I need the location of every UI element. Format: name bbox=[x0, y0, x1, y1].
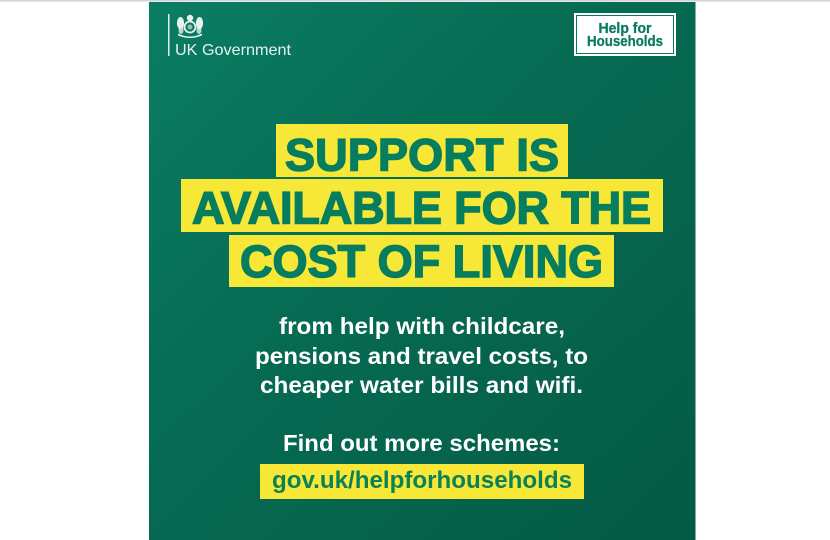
website link box: gov.uk/helpforhouseholds bbox=[272, 467, 572, 494]
UK Government logo bbox=[168, 14, 292, 59]
headline line 1: SUPPORT IS bbox=[285, 130, 559, 180]
Help for Households badge: Households bbox=[587, 34, 663, 50]
Help for Households badge: Help for bbox=[598, 21, 652, 37]
headline line 2: AVAILABLE FOR THE bbox=[192, 182, 651, 234]
logo wordmark: UK Government bbox=[175, 42, 292, 59]
description text: pensions and travel costs, to bbox=[255, 343, 588, 369]
headline bbox=[181, 124, 663, 287]
description text: from help with childcare, bbox=[279, 313, 565, 339]
call to action heading: Find out more schemes: bbox=[283, 430, 560, 456]
icon: royal coat of arms bbox=[177, 15, 203, 38]
headline line 3: COST OF LIVING bbox=[240, 236, 603, 287]
description text: cheaper water bills and wifi. bbox=[260, 372, 583, 398]
Help for Households badge bbox=[574, 13, 676, 56]
green background panel bbox=[149, 2, 696, 540]
description text bbox=[255, 313, 588, 398]
